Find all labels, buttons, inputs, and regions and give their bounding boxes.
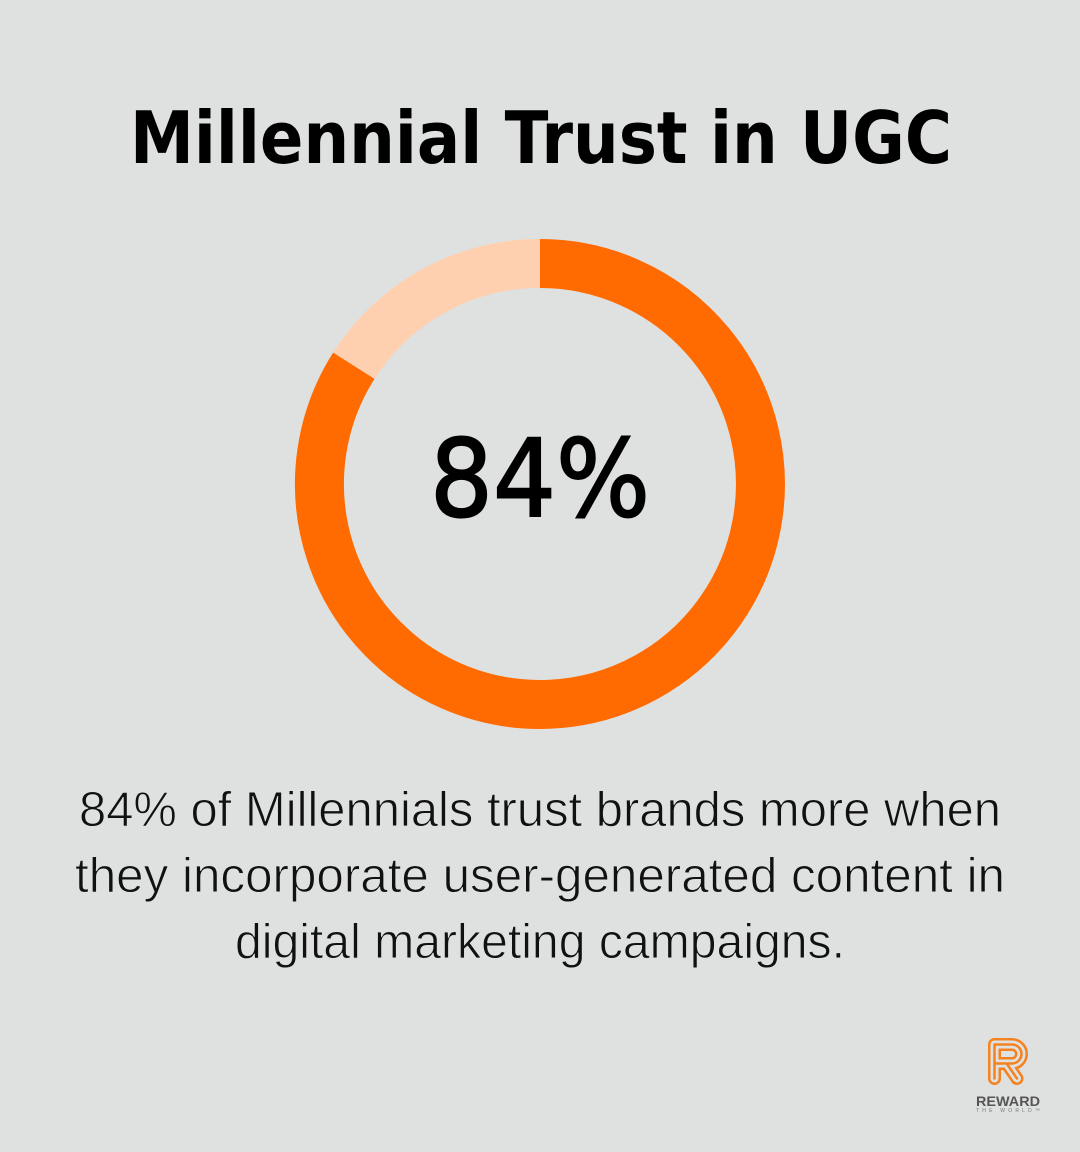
logo: Reward the World — [976, 1044, 1040, 1114]
donut chart: 84% — [319, 264, 760, 705]
title: Millennial Trust in UGC — [130, 96, 952, 180]
donut center value: 84% — [430, 418, 650, 542]
description text: they incorporate user-generated content in — [75, 849, 1005, 903]
donut value segment — [319, 264, 760, 705]
description text — [75, 783, 1005, 969]
icon: R mark — [994, 1044, 1022, 1078]
description text: digital marketing campaigns. — [235, 915, 845, 969]
logo wordmark: REWARD — [976, 1093, 1040, 1109]
logo tagline: THE WORLD™ — [976, 1108, 1040, 1114]
donut remainder segment — [354, 264, 540, 366]
description text: 84% of Millennials trust brands more when — [79, 783, 1001, 837]
